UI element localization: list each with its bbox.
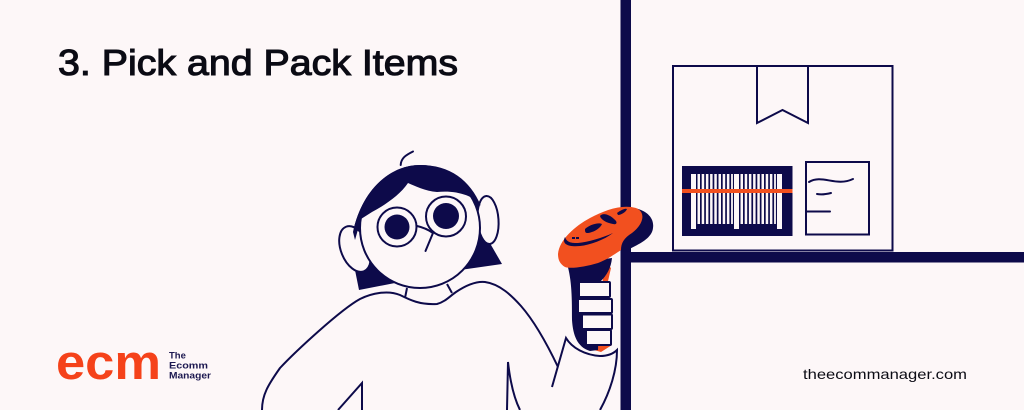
fingers: [578, 282, 612, 345]
shelf: [620, 0, 1024, 410]
fringe: [353, 165, 481, 240]
scanner back: [619, 207, 653, 250]
box outline: [673, 66, 892, 250]
logo wordmark: Ecomm: [169, 360, 208, 372]
glasses: [378, 196, 466, 251]
ear left: [333, 222, 377, 276]
logo wordmark: Manager: [169, 370, 211, 382]
sleeve cuff: [552, 338, 617, 410]
scanner red line: [682, 189, 792, 193]
ear right: [476, 195, 500, 245]
logo wordmark: [169, 350, 211, 382]
box tape bookmark: [757, 66, 808, 123]
back hair: [353, 165, 502, 290]
title: 3. Pick and Pack Items: [58, 42, 458, 83]
barcode scanner: [552, 207, 653, 410]
stray hair: [401, 152, 413, 165]
website url: theecommanager.com: [803, 366, 967, 382]
person illustration: [262, 152, 558, 410]
panel: cardboard box: [673, 66, 892, 250]
logo wordmark: The: [169, 350, 186, 362]
left arm crease: [338, 383, 362, 410]
sweater outline: [262, 282, 558, 410]
right arm crease: [507, 362, 520, 410]
neck lines: [405, 284, 452, 298]
logo mark ecm: ecm: [56, 336, 161, 390]
scanner head details: [564, 209, 627, 246]
scanner handle right: [594, 262, 612, 352]
sleeve cuff outline: [552, 338, 617, 410]
scanner head: [558, 207, 642, 268]
face: [360, 168, 480, 288]
scanner handle dark: [567, 258, 612, 351]
shipping label: [806, 162, 869, 234]
barcode: [682, 166, 792, 236]
logo: [56, 336, 211, 390]
